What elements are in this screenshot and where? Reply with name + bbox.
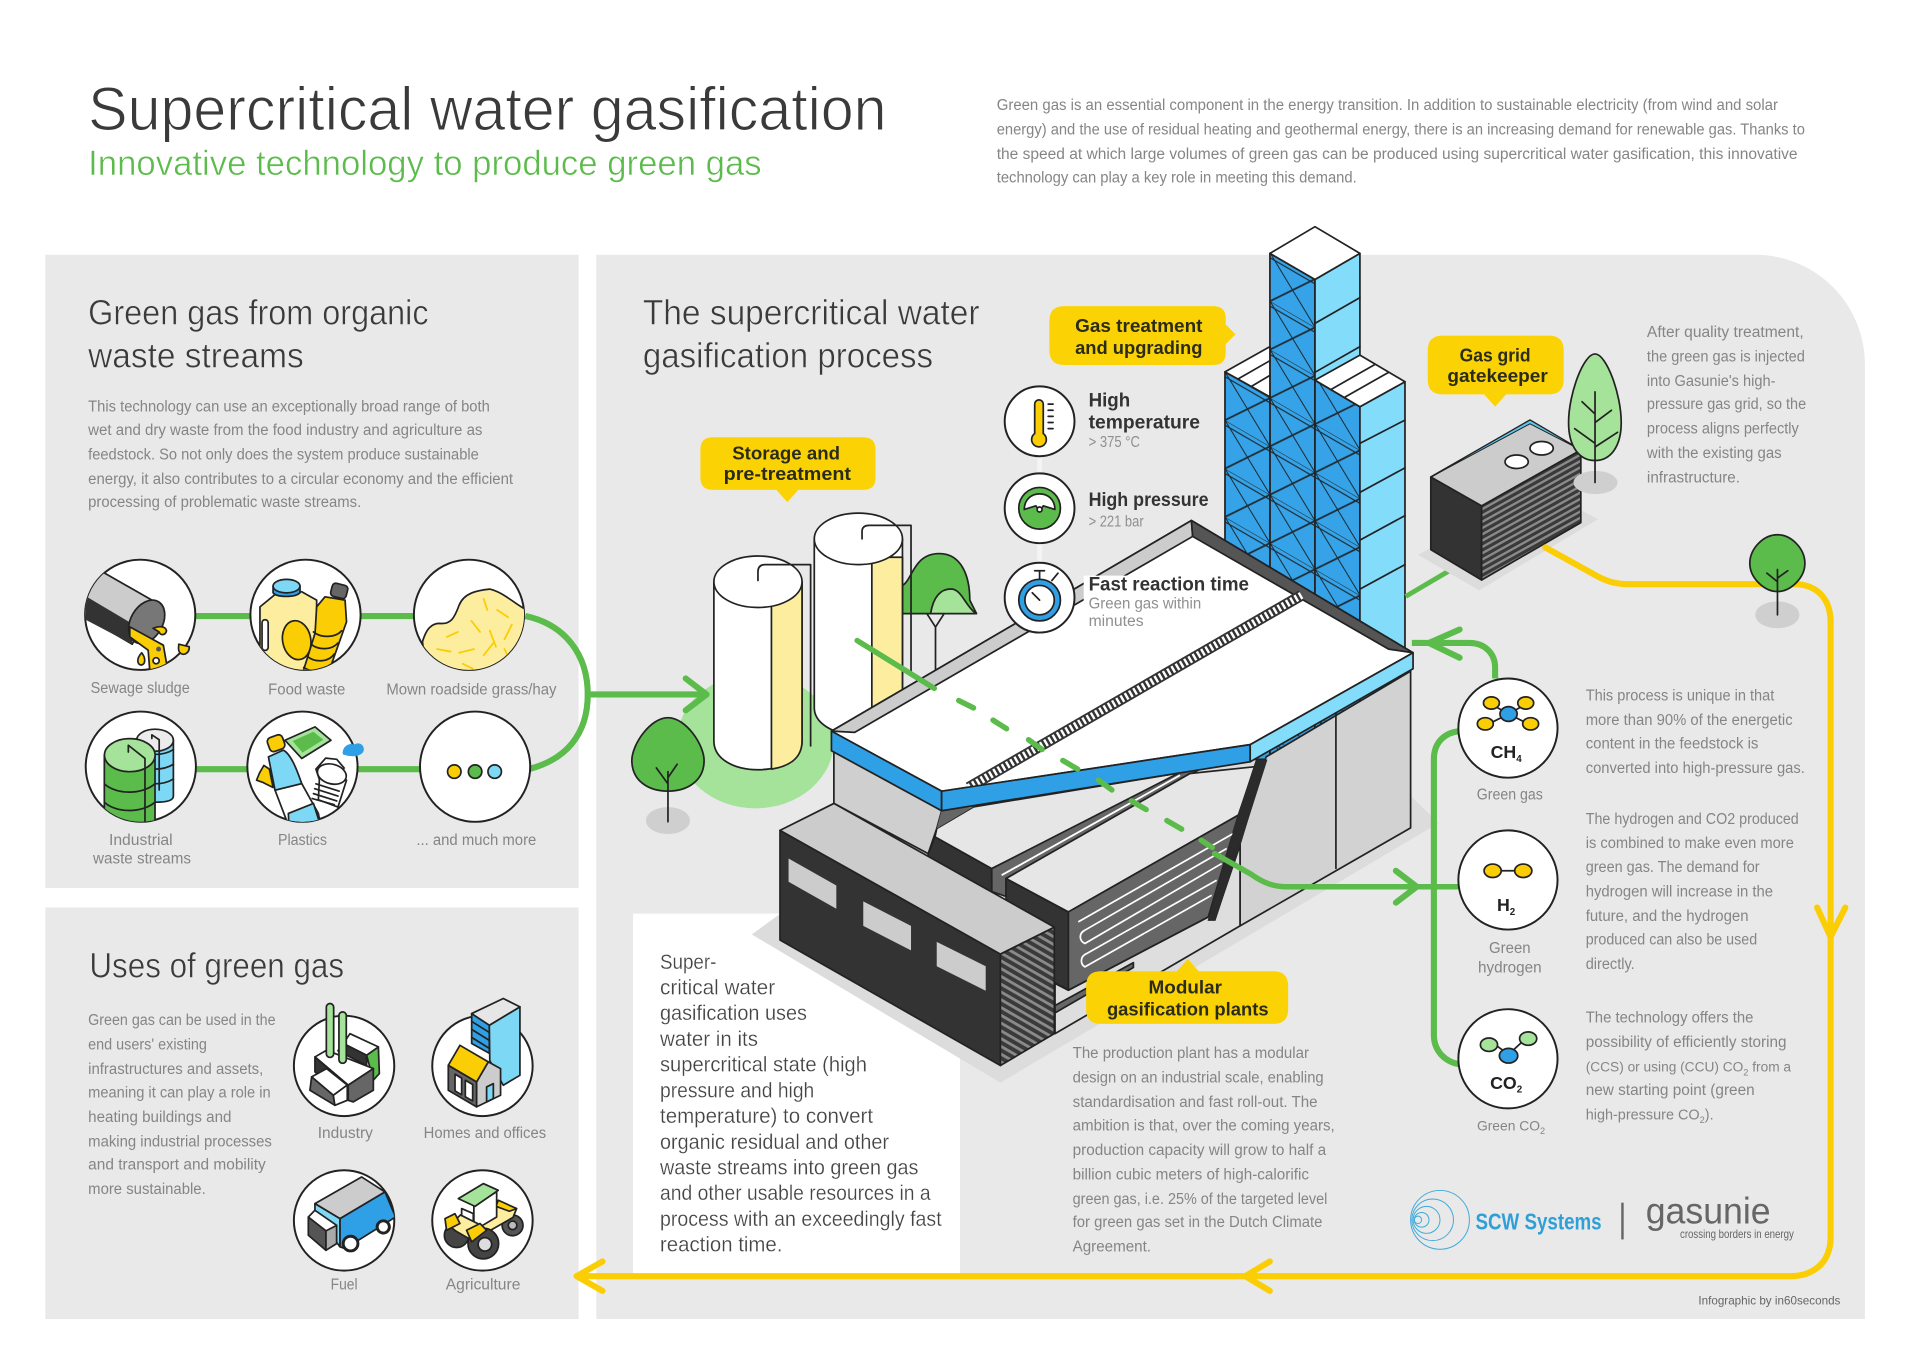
text box background [633, 914, 960, 1275]
storage tanks [677, 513, 977, 808]
text: hydrogen and CO2: directly. [1586, 956, 1635, 973]
text: process is unique [1586, 688, 1805, 777]
text: hydrogen and CO2: produced can also be used [1586, 931, 1757, 948]
yellow gas grid pipeline [577, 547, 1845, 1291]
body text: uses of green gas: Green gas can be used in the [88, 1012, 276, 1029]
heading: organic waste streams [87, 293, 429, 375]
body text: organic waste streams: wet and dry waste from the food industry and agriculture as [87, 422, 483, 439]
callout: gas grid gatekeeper: gatekeeper [1447, 365, 1548, 386]
panel: uses of green gas [45, 908, 579, 1319]
condition labels: High pressure [1089, 490, 1209, 511]
icon: industry [294, 1004, 394, 1116]
icon: homes and offices [432, 999, 533, 1116]
text: modular production plant: design on an industrial scale, enabling [1073, 1070, 1324, 1087]
tank: rear [814, 513, 911, 759]
roof shadow wedge [937, 807, 973, 829]
intro paragraph: technology can play a key role in meeting this demand. [997, 169, 1357, 186]
green line linking CO2 and CH4 [1434, 731, 1460, 1064]
feedstock labels: Food waste [268, 681, 345, 698]
use labels: Homes and offices [424, 1125, 546, 1142]
text: gas grid: the green gas is injected [1647, 348, 1805, 365]
text: gas grid: with the existing gas [1646, 445, 1782, 462]
heading: organic waste streams: waste streams [87, 335, 304, 375]
condition labels [1089, 391, 1249, 630]
molecule: methane [1458, 678, 1558, 778]
icon: food waste [250, 560, 361, 676]
roof [831, 521, 1413, 811]
heading: organic waste streams: Green gas from organic [88, 293, 429, 333]
green line to gas grid [1406, 565, 1460, 596]
molecule: carbon dioxide [1458, 1009, 1558, 1108]
label: green CO2: Green CO [1477, 1117, 1540, 1133]
molecule: carbon dioxide: CO [1490, 1073, 1517, 1093]
feedstock connector lines [195, 616, 588, 769]
body text: organic waste streams: energy, it also contributes to a circular economy and the efficient [88, 471, 514, 488]
intro paragraph: Green gas is an essential component in the energy transition. In addition to sustainable electricity (from wind and solar [997, 97, 1778, 114]
callout: gas grid gatekeeper: Gas grid [1460, 344, 1531, 365]
feedstock labels: Plastics [278, 832, 327, 849]
label: green hydrogen: hydrogen [1478, 959, 1542, 976]
intro paragraph [997, 97, 1805, 186]
condition labels: > 375 °C [1089, 434, 1140, 451]
icon: sewage sludge [84, 558, 196, 671]
callout: storage and pre-treatment [700, 437, 876, 502]
body text: organic waste streams [87, 399, 514, 511]
text: modular production plant: green gas, i.e. 25% of the targeted level [1073, 1191, 1327, 1208]
tree: left of tanks [632, 718, 704, 834]
text: supercritical explanation: temperature) to convert [660, 1104, 873, 1128]
tree: behind tanks [902, 554, 977, 671]
text: modular production plant: Agreement. [1073, 1239, 1151, 1256]
text: supercritical explanation: Super- [660, 950, 716, 974]
text: supercritical explanation: supercritical state (high [660, 1053, 867, 1077]
use labels: Fuel [331, 1277, 358, 1294]
label: green hydrogen: Green [1489, 940, 1531, 957]
green line from CH4 to towers [1412, 630, 1495, 678]
icon: industrial waste streams [86, 712, 196, 828]
body text: uses of green gas: heating buildings and [88, 1109, 231, 1126]
text: modular production plant: for green gas set in the Dutch Climate [1073, 1214, 1322, 1231]
body text: uses of green gas: making industrial processes [88, 1133, 272, 1150]
credit: Infographic by in60seconds [1698, 1294, 1841, 1307]
body text: uses of green gas: end users' existing [88, 1037, 207, 1054]
text: modular production plant: The production plant has a modular [1073, 1045, 1309, 1062]
body text: organic waste streams: This technology can use an exceptionally broad range of both [88, 399, 490, 416]
text: supercritical explanation: gasification uses [660, 1001, 807, 1025]
condition labels: High [1089, 391, 1130, 412]
condition labels: > 221 bar [1089, 514, 1144, 531]
body text: organic waste streams: processing of problematic waste streams. [88, 494, 361, 511]
text: hydrogen and CO2: is combined to make even more [1586, 835, 1794, 852]
logo divider [1621, 1203, 1623, 1239]
condition labels: minutes [1089, 613, 1144, 630]
text: technology CCS CCU: ). [1705, 1107, 1714, 1123]
heading: uses of green gas: Uses of green gas [89, 945, 344, 985]
front module [1006, 767, 1255, 990]
green process line [857, 641, 1457, 903]
label: green gas: Green gas [1477, 787, 1543, 804]
text: technology CCS CCU: from a [1748, 1060, 1791, 1075]
feedstock labels [91, 680, 557, 867]
tank: front [714, 556, 811, 770]
body text: uses of green gas [88, 1012, 276, 1198]
title: Supercritical water gasification [88, 75, 887, 143]
gas grid gatekeeper building [1418, 420, 1598, 590]
strut [1208, 760, 1267, 920]
molecule: hydrogen: H [1497, 895, 1510, 915]
icon: thermometer [1005, 386, 1074, 456]
text: process is unique: content in the feedstock is [1586, 735, 1759, 752]
text: gas grid: process aligns perfectly [1647, 421, 1799, 438]
icon: and much more [420, 712, 530, 822]
ground shadow [752, 735, 1439, 1083]
heading: the process: The supercritical water [643, 293, 980, 333]
callout: gas treatment and upgrading: and upgrading [1075, 337, 1202, 358]
molecule: methane: CH [1491, 742, 1516, 762]
modular plant building [780, 521, 1413, 1066]
text: supercritical explanation: pressure and high [660, 1078, 814, 1102]
text: supercritical explanation: waste streams into green gas [659, 1156, 918, 1180]
logo: SCW Systems: SCW Systems [1476, 1209, 1602, 1235]
heading: the process: gasification process [643, 335, 933, 375]
text: supercritical explanation: water in its [659, 1027, 758, 1051]
body text: uses of green gas: meaning it can play a role in [88, 1084, 271, 1101]
logo: Gasunie: crossing borders in energy [1680, 1228, 1794, 1241]
text: modular production plant: ambition is that, over the coming years, [1073, 1117, 1335, 1134]
feed arrow [588, 678, 707, 710]
heading: the process [643, 293, 980, 375]
text: supercritical explanation: and other usable resources in a [660, 1181, 931, 1205]
text: technology CCS CCU: new starting point (green [1586, 1082, 1755, 1099]
text: supercritical explanation: process with an exceedingly fast [660, 1207, 942, 1231]
condition labels: Green gas within [1089, 596, 1201, 613]
panel: green gas from organic waste streams [45, 255, 588, 888]
text: hydrogen and CO2: green gas. The demand for [1586, 859, 1760, 876]
pipeline tree [1750, 535, 1805, 628]
body text: uses of green gas: more sustainable. [88, 1181, 206, 1198]
label: green hydrogen [1478, 940, 1542, 976]
text: technology CCS CCU: (CCS) or using (CCU) CO [1586, 1060, 1743, 1075]
molecule: hydrogen [1458, 830, 1558, 930]
text: process is unique: converted into high-pressure gas. [1586, 760, 1805, 777]
intro paragraph: energy) and the use of residual heating and geothermal energy, there is an increasing demand for renewable gas. Thanks to [997, 122, 1805, 139]
process conditions [1005, 386, 1249, 633]
text: gas grid: into Gasunie's high- [1647, 373, 1776, 390]
callout: gas grid gatekeeper [1428, 336, 1564, 407]
text: gas grid: pressure gas grid, so the [1647, 396, 1806, 413]
logo: SCW Systems [1411, 1190, 1602, 1249]
intro paragraph: the speed at which large volumes of green gas can be produced using supercritical water gasification, this innovative [997, 146, 1798, 163]
subtitle: Innovative technology to produce green gas [88, 143, 762, 183]
callout: storage and pre-treatment: pre-treatment [724, 463, 851, 484]
text: gas grid: After quality treatment, [1647, 324, 1804, 341]
text: technology CCS CCU: 2 [1743, 1067, 1748, 1077]
molecule: hydrogen: 2 [1510, 907, 1516, 918]
feedstock labels: waste streams [92, 850, 191, 867]
use labels: Industry [318, 1125, 373, 1142]
use labels [318, 1125, 546, 1294]
condition labels: Fast reaction time [1089, 574, 1249, 595]
feedstock labels: Mown roadside grass/hay [386, 681, 557, 698]
icon: fuel [294, 1170, 396, 1271]
molecule: carbon dioxide: 2 [1517, 1084, 1523, 1095]
callout: storage and pre-treatment: Storage and [732, 442, 840, 463]
label: green CO2: 2 [1540, 1126, 1545, 1136]
text: modular production plant: standardisation and fast roll-out. The [1073, 1094, 1318, 1111]
callout: modular gasification plants [1086, 959, 1288, 1024]
body text: uses of green gas: and transport and mobility [88, 1157, 266, 1174]
text: hydrogen and CO2: future, and the hydrogen [1586, 908, 1749, 925]
text: gas grid [1646, 324, 1806, 487]
right wall [1240, 671, 1411, 926]
panel: main process background [596, 255, 1865, 1319]
text: technology CCS CCU: high-pressure CO [1586, 1107, 1700, 1123]
left wall under roof [834, 750, 942, 854]
gas grid tree [1569, 354, 1621, 494]
rear module [928, 769, 1200, 900]
molecule: methane: 4 [1516, 754, 1522, 765]
text: technology CCS CCU: The technology offers the [1586, 1010, 1753, 1027]
callout: gas treatment and upgrading [1049, 306, 1236, 365]
body text: organic waste streams: feedstock. So not only does the system produce sustainable [88, 446, 479, 463]
callout: modular gasification plants: Modular [1149, 976, 1222, 997]
text: modular production plant: billion cubic meters of high-calorific [1073, 1166, 1309, 1183]
callout: modular gasification plants: gasification plants [1107, 998, 1269, 1019]
text: supercritical explanation: organic residual and other [660, 1130, 889, 1154]
icon: mown grass [412, 558, 526, 671]
text: hydrogen and CO2: hydrogen will increase in the [1586, 884, 1773, 901]
condition labels: temperature [1089, 413, 1200, 434]
logo: Gasunie: gasunie [1646, 1191, 1771, 1232]
icon: pressure gauge [1005, 473, 1074, 543]
lower slabs [1055, 845, 1240, 1034]
text: technology CCS CCU: possibility of efficiently storing [1586, 1034, 1787, 1051]
icon: stopwatch [1005, 563, 1074, 633]
text: gas grid: infrastructure. [1647, 470, 1740, 487]
text: supercritical explanation: critical water [660, 975, 775, 999]
body text: uses of green gas: infrastructures and assets, [88, 1061, 263, 1078]
gas treatment towers [1225, 227, 1405, 759]
text: process is unique: more than 90% of the energetic [1586, 712, 1793, 729]
icon: plastics [247, 712, 364, 827]
feedstock labels: ... and much more [416, 832, 536, 849]
text: hydrogen and CO2 [1586, 811, 1799, 973]
front dark block [780, 803, 1054, 1066]
text: technology CCS CCU: 2 [1700, 1115, 1705, 1125]
feedstock labels: Sewage sludge [91, 680, 190, 697]
text: hydrogen and CO2: The hydrogen and CO2 produced [1586, 811, 1799, 828]
text: process is unique: This process is unique in that [1586, 688, 1775, 705]
text: supercritical explanation [659, 950, 942, 1257]
use labels: Agriculture [446, 1277, 520, 1294]
text: modular production plant [1073, 1045, 1335, 1256]
text: modular production plant: production capacity will grow to half a [1073, 1142, 1327, 1159]
callout: gas treatment and upgrading: Gas treatment [1075, 315, 1202, 336]
feedstock labels: Industrial [109, 832, 173, 849]
text: supercritical explanation: reaction time. [660, 1233, 782, 1257]
text: technology CCS CCU [1586, 1010, 1791, 1125]
icon: agriculture [432, 1170, 533, 1271]
